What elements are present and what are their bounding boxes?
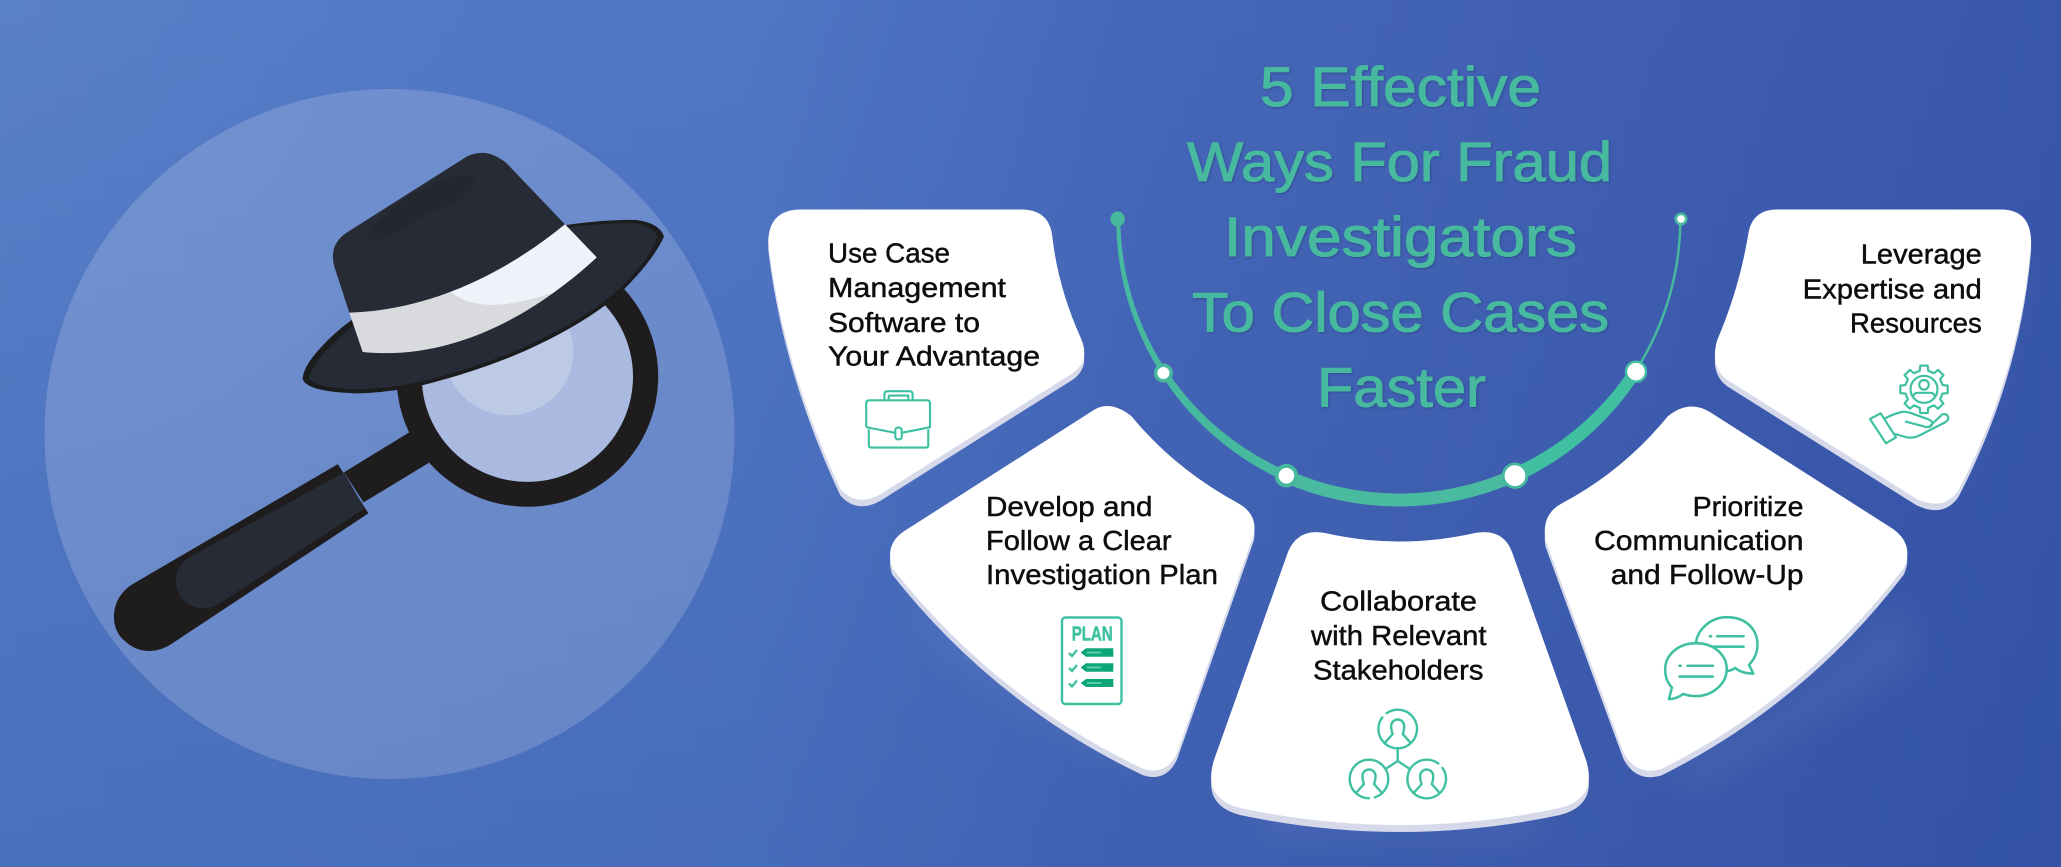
text: card heading: Software to: [828, 307, 980, 338]
text: card heading: [828, 237, 1040, 372]
text: card heading: Leverage: [1861, 239, 1982, 270]
node: end dot: [1676, 214, 1686, 224]
magnifier stem: [344, 432, 429, 502]
crown dent: [368, 175, 475, 239]
card face: [1211, 532, 1589, 825]
title: Investigators: [1224, 205, 1577, 268]
panel: use case management software: [768, 209, 1084, 506]
icon: gear with person over open hand: [1870, 366, 1948, 443]
title: To Close Cases: [1192, 280, 1609, 344]
magnifier ring: [396, 247, 658, 507]
hat band: [350, 224, 597, 354]
icon: fedora hat: [303, 153, 664, 393]
timeline arc with five nodes: [1110, 212, 1686, 506]
title: 5 Effective: [1260, 55, 1541, 118]
card shape: [1545, 406, 1907, 777]
text: card heading: Collaborate: [1320, 586, 1477, 617]
text: card heading: Use Case: [828, 237, 950, 268]
node 2: [1277, 466, 1296, 486]
text: card heading: Stakeholders: [1313, 654, 1484, 686]
text: card heading: Develop and: [986, 491, 1152, 522]
translucent circle backdrop: [44, 89, 734, 779]
text: card heading: Follow a Clear: [986, 525, 1172, 556]
icon: chat bubbles: [1665, 617, 1758, 699]
card shape: [890, 406, 1254, 777]
icon: plan checklist: [1062, 618, 1122, 704]
panel: leverage expertise and resources: [1715, 209, 2031, 510]
node 1: [1156, 365, 1171, 381]
text: card heading: Investigation Plan: [986, 559, 1218, 590]
panel: collaborate with relevant stakeholders: [1211, 532, 1589, 832]
text: card heading: [1310, 586, 1487, 686]
arc segments: [1116, 219, 1680, 506]
hat crown: [333, 153, 565, 327]
handle grip: [176, 472, 364, 608]
icon: briefcase: [866, 391, 930, 448]
text: card heading: Communication: [1594, 525, 1804, 556]
magnifier handle: [114, 464, 368, 651]
text: card heading: Management: [828, 272, 1006, 303]
text: card heading: [1803, 239, 1982, 339]
panel: prioritize communication and follow-up: [1545, 406, 1907, 777]
icon: plan checklist: PLAN: [1072, 624, 1113, 646]
text: card heading: [986, 491, 1218, 590]
card shape: [768, 209, 1084, 506]
hat brim: [309, 223, 657, 389]
lens highlight: [444, 288, 573, 415]
panel: develop and follow a clear investigation plan: [890, 406, 1254, 777]
icon: magnifying glass: [114, 247, 658, 651]
node 4: [1626, 362, 1646, 382]
text: card heading: Prioritize: [1693, 491, 1804, 522]
card shape: [1715, 209, 2031, 510]
node 3: [1503, 464, 1527, 488]
soft glow under the cards: [900, 250, 2035, 840]
magnifier lens: [422, 271, 633, 482]
text: card heading: Your Advantage: [828, 341, 1040, 372]
text: card heading: with Relevant: [1310, 620, 1487, 651]
node: start dot: [1110, 212, 1125, 226]
icon: connected people: [1350, 702, 1454, 806]
card shadow: [1211, 539, 1589, 832]
hat brim edge: [303, 220, 664, 393]
title: Faster: [1317, 356, 1486, 418]
illustration: detective magnifier in circle: [44, 89, 734, 779]
text: card heading: and Follow-Up: [1611, 559, 1804, 590]
title: [1187, 55, 1612, 418]
title: Ways For Fraud: [1187, 130, 1612, 193]
text: card heading: Expertise and: [1803, 273, 1982, 304]
text: card heading: [1594, 491, 1804, 590]
text: card heading: Resources: [1850, 308, 1982, 339]
